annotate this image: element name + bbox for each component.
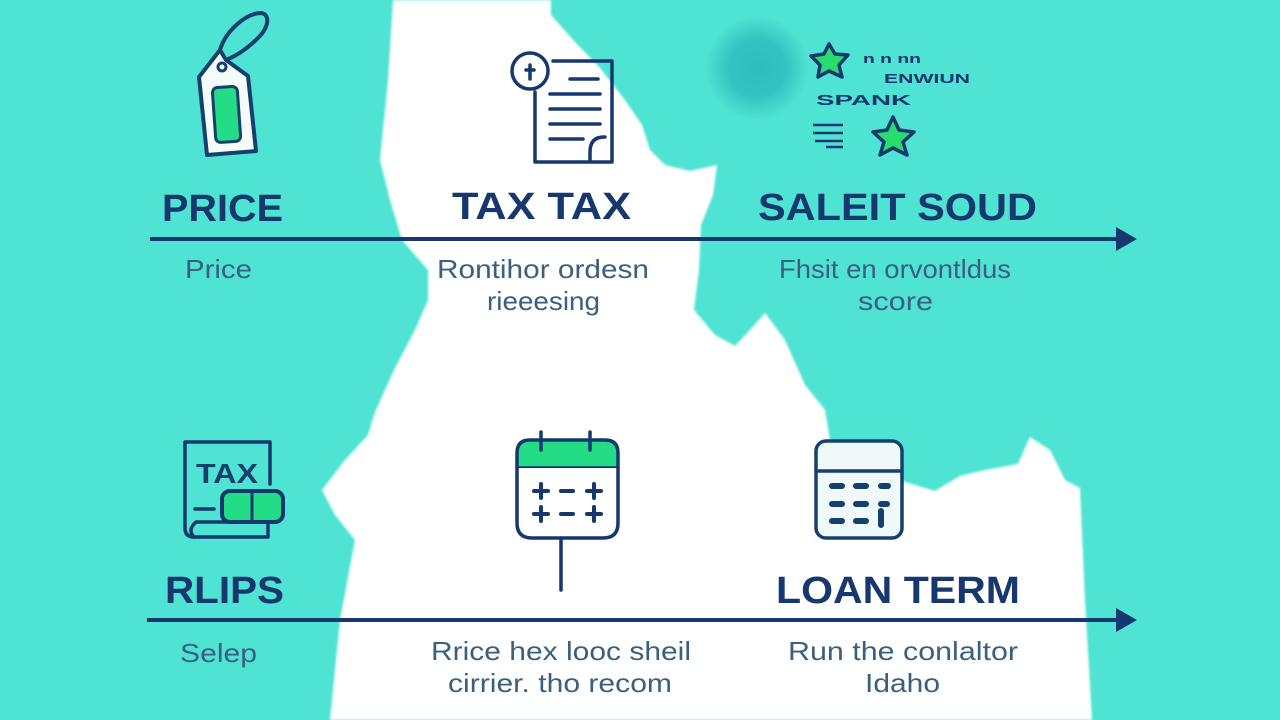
label: Price: Price	[185, 254, 252, 284]
icon: stars and score marks	[811, 44, 914, 155]
icon: price tag	[199, 13, 267, 155]
heading: LOAN TERM: LOAN TERM	[776, 570, 1020, 612]
small text: score notes: ENWIUN	[884, 71, 970, 86]
icon: calendar on a stem	[517, 432, 618, 590]
small text: score notes	[816, 51, 970, 109]
text: price description: cirrier. tho recom	[448, 668, 672, 698]
heading: SALEIT SOUD: SALEIT SOUD	[758, 187, 1037, 229]
text: loan term description: Idaho	[865, 668, 940, 698]
icon: tax form with cash	[185, 442, 283, 537]
text: score description: Fhsit en orvontldus	[779, 254, 1011, 284]
heading: PRICE: PRICE	[162, 188, 283, 230]
small text: score notes: SPANK	[816, 92, 911, 109]
text: tax description	[437, 254, 649, 316]
small text: score notes: n n nn	[863, 51, 921, 66]
text: loan term description: Run the conlaltor	[788, 636, 1018, 666]
label: Selep: Selep	[180, 638, 257, 668]
heading: TAX TAX: TAX TAX	[452, 186, 632, 228]
text: price description: Rrice hex loоc sheil	[431, 636, 691, 666]
text: loan term description	[788, 636, 1018, 698]
text: score description	[779, 254, 1011, 316]
icon: tax form with cash: TAX	[196, 458, 258, 489]
text: tax description: rieeesing	[487, 286, 600, 316]
text: score description: score	[858, 286, 933, 316]
icon: calculator	[816, 441, 902, 538]
text: tax description: Rontihor ordesn	[437, 254, 649, 284]
heading: RLIPS: RLIPS	[165, 570, 284, 612]
text: price description	[431, 636, 691, 698]
shaded blob	[705, 16, 809, 120]
arrow: bottom timeline	[147, 608, 1137, 632]
map: Idaho silhouette	[322, 0, 1092, 720]
arrow: top timeline	[150, 227, 1137, 251]
icon: tax document	[512, 53, 612, 162]
